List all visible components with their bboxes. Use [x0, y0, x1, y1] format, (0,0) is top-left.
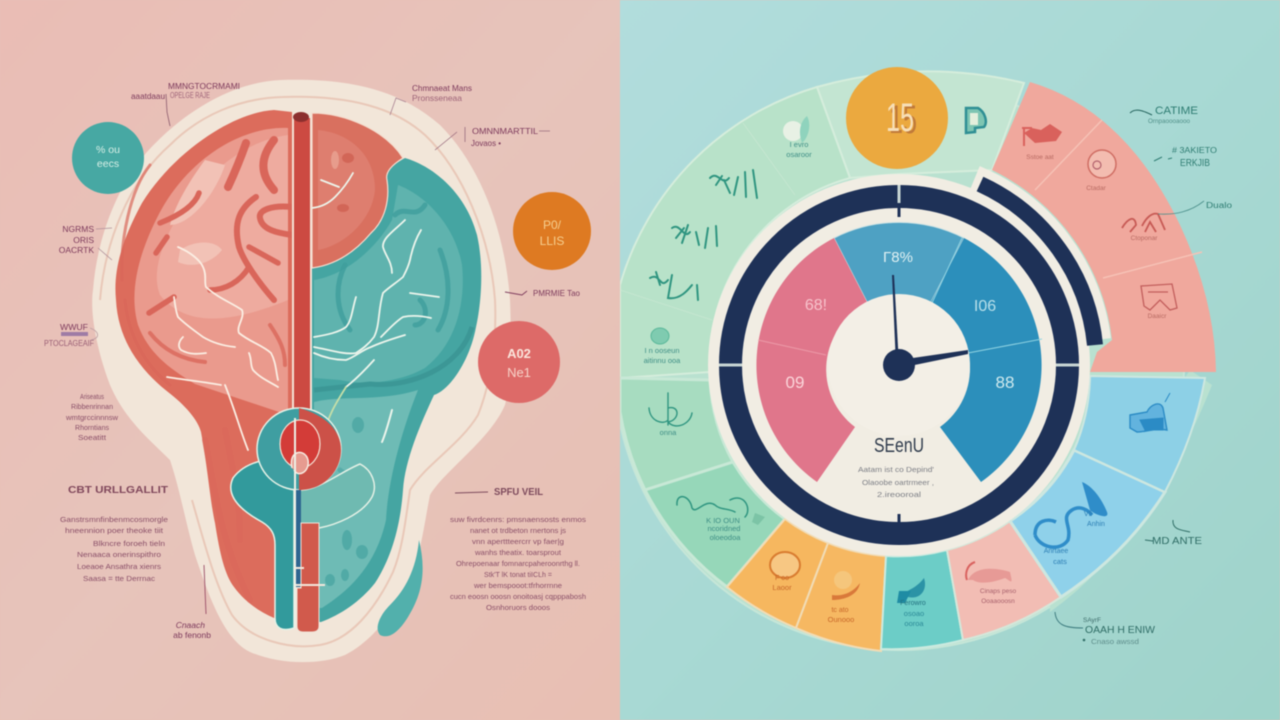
icon: oval with label: aitinnu ooa — [644, 356, 681, 365]
wheel base — [614, 80, 1184, 650]
label: upper right: OMNNMARTTIL — [472, 126, 538, 136]
gauge values — [786, 249, 1014, 392]
text block: left paragraph: Saasa = tte Derrnac — [83, 574, 155, 583]
text block: left paragraph: Loeaoe Ansathra xienrs — [77, 562, 161, 571]
label: upper right: Jovaos • — [471, 138, 501, 148]
label: right middle — [505, 288, 580, 298]
dial: outer navy arc — [980, 184, 1095, 345]
segment: blue — [1010, 450, 1165, 597]
key-shaped lower structure — [231, 408, 374, 632]
inner outline — [100, 97, 495, 646]
icon: orange bowl: tc ato — [831, 607, 849, 614]
label: left lower: PTOCLAGEAIF — [44, 338, 94, 348]
label: bottom left — [173, 565, 211, 640]
gauge caption: 2.ireooroal — [877, 490, 921, 499]
text block: left paragraph: Ganstrsmnfinbenmcosmorgle — [60, 515, 168, 524]
icon: glyph row one — [710, 170, 757, 198]
icon: glyph row three — [650, 272, 698, 300]
icon: salmon outline: Daaicr — [1148, 313, 1167, 320]
gauge values: Γ8% — [883, 249, 913, 266]
label: upper right wheel: ERKJIB — [1180, 158, 1210, 169]
segment: light blue — [1074, 376, 1205, 492]
gauge values: 09 — [786, 373, 804, 392]
label: left lower — [44, 322, 98, 348]
dial: cream disc — [708, 174, 1090, 556]
brain folds — [122, 140, 292, 600]
teal lobe band — [314, 327, 472, 390]
icon: top mint tab — [966, 108, 986, 133]
label: lower right wheel: MD ANTE — [1152, 536, 1202, 547]
icon: oval with label: I n ooseun — [644, 346, 680, 355]
label: left middle: OACRTK — [59, 245, 94, 255]
icon: blue swirl: Anhin — [1087, 521, 1105, 528]
icon: blue swirl: Anrtaee — [1044, 548, 1068, 555]
gauge values: I06 — [974, 298, 996, 315]
text block: right paragraph: vnn aperttteercrr vp faer|g — [472, 537, 564, 546]
segment: pink — [947, 521, 1061, 640]
text block: left notes — [65, 392, 119, 442]
icon: orange ring: F oo — [775, 575, 789, 582]
dial: centre gauge — [708, 174, 1096, 556]
chart: outer wheel — [614, 71, 1216, 651]
teal blotches — [325, 417, 368, 586]
segment: top mint — [817, 71, 1024, 178]
teal right hemisphere — [312, 113, 481, 622]
label: left middle: ORIS — [73, 235, 94, 245]
circle: orange stat: LLIS — [540, 234, 564, 248]
white veins right — [312, 173, 439, 442]
text block: left notes: Ribbenrinnan — [71, 402, 113, 411]
icons: wheel orange and teal segments — [770, 124, 1204, 628]
gauge title: SEenU — [874, 435, 924, 457]
label: CATIME: CATIME — [1155, 105, 1198, 117]
ring gaps and ticks — [719, 185, 1079, 365]
icon: orange ring — [770, 552, 800, 592]
segment: right blue — [930, 238, 1042, 482]
icon: teal iron — [897, 578, 926, 628]
segment: pink — [756, 238, 868, 482]
teal drip — [378, 540, 423, 636]
icon: salmon figure — [1122, 201, 1204, 242]
label: top left — [131, 81, 240, 126]
icon: salmon figure: Ctoponar — [1131, 235, 1158, 242]
white veins left — [167, 247, 278, 450]
circle: rose stat: A02 — [507, 346, 531, 361]
circle: orange 15 badge — [846, 67, 948, 169]
icon: pod — [783, 116, 812, 159]
circle: orange 15 badge: 15 — [889, 98, 917, 142]
label: bottom right wheel: SAyrF — [1083, 617, 1101, 624]
segment: salmon — [992, 82, 1216, 372]
label: upper right — [435, 126, 550, 150]
icon: waves with label: K IO OUN — [706, 516, 740, 525]
icon: pink fan: Cinaps peso — [980, 588, 1016, 595]
circle: rose stat — [478, 321, 560, 403]
label: right middle: PMRMIE Tao — [533, 288, 580, 298]
text block: right paragraph: suw fivrdcenrs: pmsnaensosts enmos — [450, 515, 586, 524]
circle: teal stat: % ou — [96, 144, 120, 156]
circle: orange stat: P0/ — [543, 218, 562, 232]
icon: orange bowl: Ounooo — [828, 615, 854, 624]
circle: rose stat: Ne1 — [507, 365, 531, 380]
label: Dualo: Dualo — [1206, 201, 1233, 210]
gauge caption: Olaoobe oartrmeer , — [862, 478, 934, 487]
text block: left paragraph — [60, 515, 168, 583]
label: top centre — [390, 83, 472, 115]
icon: blue swirl: cats — [1053, 557, 1067, 566]
label: bottom left: Cnaach — [176, 620, 205, 630]
icon: oval with label — [644, 328, 681, 365]
label: top centre: Chmnaeat Mans — [412, 83, 472, 93]
label: left middle: NGRMS — [62, 224, 94, 234]
label: upper right wheel — [1154, 145, 1217, 169]
label: left lower: WWUF — [60, 322, 88, 332]
icon: teal iron: ooroa — [904, 619, 924, 628]
icon: blue swirl: Vfi — [1084, 511, 1093, 518]
white hub disc — [828, 294, 970, 436]
icon: waves with label: ncoridned — [708, 524, 740, 533]
segment: orange one — [727, 519, 828, 628]
text block: right paragraph: Osnhoruors dooos — [486, 603, 550, 612]
icon: tulip: onna — [660, 428, 677, 437]
label: bottom right wheel: Cnaso awssd — [1091, 639, 1139, 646]
label: top left: aaatdaau — [131, 91, 165, 101]
icon: waves with label: oloeodoa — [710, 533, 741, 542]
icon: salmon star — [1022, 124, 1062, 161]
icon: orange ring: Laoor — [772, 583, 792, 592]
segment: top blue — [834, 222, 964, 304]
icon: orange bowl — [828, 571, 860, 624]
icon: teal iron: osoao — [904, 609, 924, 618]
icon: waves with label — [677, 497, 765, 542]
text block: left paragraph: Nenaaca onerinspithro — [77, 550, 161, 559]
cream head outline — [92, 80, 511, 662]
icon: light blue chair — [1130, 393, 1170, 432]
dial: navy ring — [730, 196, 1068, 534]
text block: right paragraph: Stk'T lK tonat tiICLh = — [484, 570, 553, 579]
label: top left: OPELGE RAJE — [170, 90, 210, 100]
icon: salmon star: Sstoe aat — [1026, 154, 1054, 161]
icon: teal iron: Ferowro — [900, 600, 926, 607]
circle: teal stat — [72, 122, 144, 194]
segment: lower-left green — [645, 462, 785, 587]
icon: pod: I evro — [790, 140, 808, 149]
teal folds — [338, 205, 448, 473]
label: upper right wheel: # 3AKIETO — [1172, 145, 1217, 155]
text block: left paragraph: Blkncre foroeh tieln — [93, 539, 165, 548]
dial: second cream band — [974, 180, 1096, 340]
text block: right paragraph: Ohrepoenaar fomnarcpaheroonrthg ll. — [456, 559, 580, 568]
icon: salmon ring: Ctadar — [1086, 185, 1107, 192]
text block: right paragraph: cucn eoosn ooosn onoitoasj cqpppabosh — [450, 592, 586, 601]
red right lobe — [312, 113, 403, 268]
label: CATIME — [1130, 105, 1198, 125]
label: top left: MMNGTOCRMAMI — [168, 81, 240, 91]
text block: left notes: Ariseatus — [80, 392, 104, 401]
text block: left paragraph: hneennion poer theoke tiit — [65, 526, 164, 535]
circle: orange 15 badge: 15 — [886, 96, 914, 140]
text block: right paragraph: wanhs theatix. toarsprout — [474, 548, 562, 557]
central red column — [292, 112, 312, 418]
panel: right background — [620, 0, 1280, 720]
icon: pink fan: Ooaaooosn — [981, 598, 1015, 605]
segment: left green — [620, 378, 733, 490]
icon: glyph row two — [672, 225, 717, 248]
text block: right paragraph — [450, 515, 586, 612]
label: top centre: Pronsseneaa — [412, 93, 462, 103]
panel: left background — [0, 0, 620, 720]
left hemisphere — [115, 110, 292, 618]
text block: right paragraph: nanet ot trdbeton rnertons js — [470, 526, 566, 535]
segment: teal — [881, 550, 963, 649]
wheel pale band lower right — [1050, 370, 1212, 612]
panel: brain diagram — [92, 80, 511, 662]
label: CATIME: Ornpaoooaooo — [1148, 119, 1191, 125]
circle: teal stat: eecs — [97, 158, 119, 170]
icons: wheel green segments — [644, 108, 986, 542]
label: left middle — [59, 224, 112, 260]
label: bottom right wheel: OAAH H ENIW — [1085, 625, 1156, 636]
segment: upper-left green — [620, 87, 850, 378]
heading: left lower: CBT URLLGALLIT — [68, 484, 169, 496]
heading: right lower — [455, 487, 543, 498]
icon: salmon outline — [1141, 284, 1177, 320]
text block: left notes: Soeatitt — [78, 433, 107, 442]
text block: left notes: Rhorntians — [75, 423, 109, 432]
gauge caption: Aatam ist co Depind' — [858, 465, 935, 474]
text block: left notes: wmtgrccinnnsw — [65, 413, 119, 422]
label: lower right wheel — [1145, 520, 1202, 547]
gauge values: 88 — [996, 373, 1014, 392]
gauge values: 68! — [805, 297, 827, 314]
icon: tulip — [649, 393, 692, 437]
label: bottom left: ab fenonb — [173, 630, 211, 640]
icon: pink fan — [966, 562, 1016, 605]
circle: orange stat — [513, 192, 591, 270]
text block: right paragraph: wer bemspooot:tfrhorrnne — [473, 581, 562, 590]
label: bottom right wheel — [1055, 612, 1156, 646]
clock hands — [883, 275, 968, 381]
heading: right lower: SPFU VEIL — [494, 487, 543, 498]
icon: pod: osaroor — [786, 150, 812, 159]
gauge caption — [858, 465, 935, 499]
icon: blue swirl — [1035, 482, 1107, 566]
icon: salmon ring — [1086, 150, 1116, 192]
segment: orange two — [796, 543, 886, 651]
